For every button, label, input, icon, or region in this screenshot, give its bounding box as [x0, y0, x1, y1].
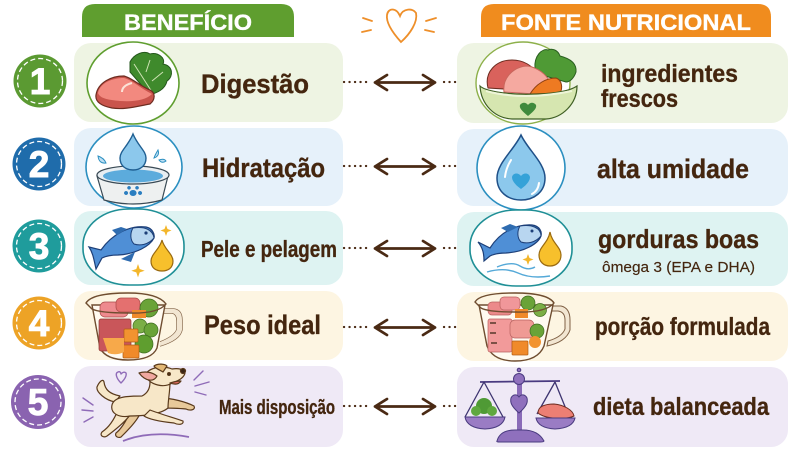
- row 2 source icon: water drop with heart: [477, 126, 565, 210]
- row 1 source label: ingredientes: [601, 60, 738, 88]
- row 5 icon: running dog: [82, 364, 209, 441]
- row 4 source panel: [457, 292, 788, 361]
- badge 2: [12, 138, 66, 190]
- row 2 source panel: [457, 126, 788, 210]
- arrow row 1: [344, 75, 460, 90]
- header: benefício: BENEFÍCIO: [124, 10, 252, 35]
- row 5 source panel: [457, 367, 788, 447]
- row 4 icon: measuring cup with food: [86, 293, 182, 360]
- arrow row 4: [344, 320, 460, 335]
- row 1 benefit label: Digestão: [201, 69, 309, 99]
- badge 1: [14, 54, 66, 108]
- row 5 benefit label: Mais disposição: [219, 397, 335, 419]
- header: benefício: [82, 4, 294, 37]
- row 1 source panel: frescos: [601, 85, 678, 113]
- row 5 source icon: balance scale: [465, 368, 575, 442]
- badge 3: 3: [29, 226, 49, 267]
- badge 3: [12, 220, 66, 272]
- row 2 icon: water bowl: [86, 126, 182, 208]
- row 2 benefit label: Hidratação: [202, 153, 325, 183]
- badge 2: 2: [29, 144, 49, 185]
- row 1 source icon: fresh food bowl: [476, 42, 577, 124]
- badge 4: [12, 296, 66, 350]
- row 5 benefit panel: [74, 364, 343, 447]
- row 4 source label: porção formulada: [595, 313, 771, 341]
- badge 1: 1: [30, 61, 50, 102]
- badge 5: [11, 375, 65, 429]
- row 2 benefit panel: [74, 126, 343, 208]
- row 1 benefit panel: [74, 42, 343, 124]
- row 3 source icon: fish, oil and waves: [470, 210, 572, 286]
- arrow row 5: [344, 399, 460, 414]
- badge 4: 4: [29, 303, 50, 344]
- row 3 source label: gorduras boas: [598, 224, 759, 254]
- row 1 source panel: [457, 42, 788, 124]
- icon: heart with rays: [362, 10, 436, 42]
- arrow row 3: [344, 241, 460, 256]
- row 3 benefit label: Pele e pelagem: [201, 236, 337, 262]
- row 3 source sub-label: ômega 3 (EPA e DHA): [602, 260, 755, 276]
- row 4 benefit panel: [74, 291, 343, 360]
- header: fonte nutricional: [481, 4, 771, 37]
- row 1 icon: meat and leaf: [87, 42, 179, 124]
- row 2 source label: alta umidade: [597, 154, 749, 184]
- row 3 benefit panel: [74, 209, 343, 285]
- row 5 source label: dieta balanceada: [593, 393, 770, 421]
- row 4 benefit label: Peso ideal: [204, 310, 321, 340]
- row 3 source panel: [457, 210, 788, 286]
- badge 5: 5: [28, 382, 48, 423]
- row 4 source icon: portion cup: [475, 293, 570, 361]
- arrow row 2: [344, 159, 460, 174]
- header: fonte nutricional: FONTE NUTRICIONAL: [501, 10, 751, 35]
- row 3 icon: fish and oil drop: [83, 209, 184, 285]
